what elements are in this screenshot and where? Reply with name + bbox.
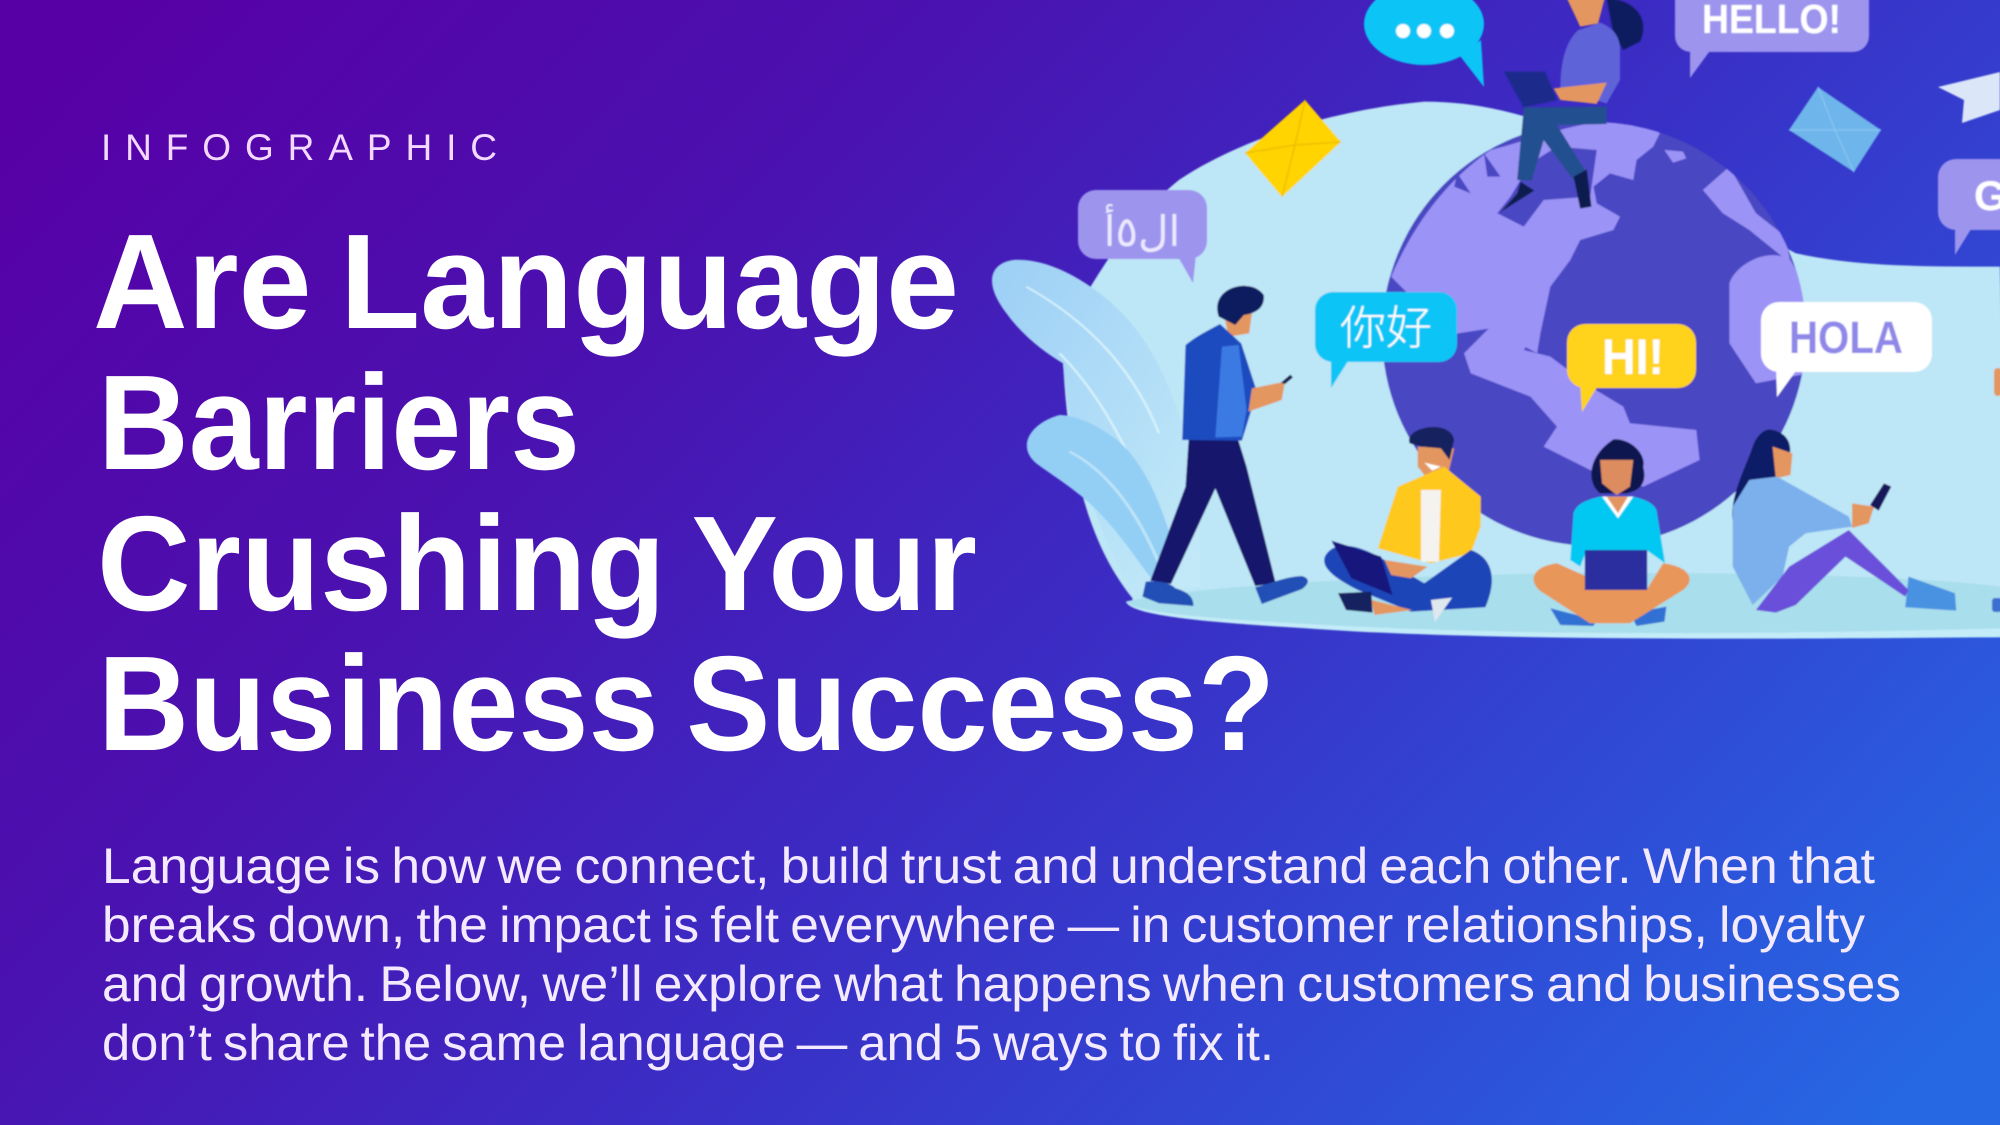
title: Crushing Your (97, 488, 977, 639)
person: woman in cyan top with laptop (1534, 439, 1690, 626)
speech bubble: HI (1567, 324, 1696, 412)
person: woman on globe with laptop (1501, 0, 1643, 212)
speech bubble: HELLO (1675, 0, 1869, 78)
icon: yellow envelope (1245, 100, 1341, 197)
speech bubble: HOLA (1761, 302, 1932, 397)
person: woman with phone leaning back (1732, 429, 1956, 613)
person: walking man with phone (1142, 286, 1308, 606)
land: central and south america (1464, 327, 1700, 487)
icon: blue envelope (1789, 87, 1881, 172)
globe (1382, 121, 1812, 546)
title: Are Language (93, 206, 959, 357)
land: americas north (1385, 121, 1660, 353)
speech bubble: Chinese greeting (1315, 292, 1457, 388)
speech bubble: Arabic (1078, 190, 1207, 283)
title (93, 206, 1275, 779)
intro paragraph: breaks down, the impact is felt everywhere — in customer relationships, loyalty (102, 897, 1865, 953)
illustration: people and globe (992, 0, 2000, 639)
intro paragraph: Language is how we connect, build trust and understand each other. When that (102, 838, 1875, 894)
speech bubble: ellipsis (1364, 0, 1484, 87)
speech bubble: G (1938, 159, 2000, 255)
light blue blob (1063, 102, 2000, 603)
intro paragraph (102, 838, 1901, 1071)
person: man in yellow jacket with laptop (1324, 427, 1492, 622)
speech bubble: Chinese greeting: 你好 (1340, 292, 1432, 358)
icon: paper plane (1938, 72, 2000, 123)
speech bubble: Arabic: ال٥أ (1104, 204, 1180, 256)
small leaf (1027, 415, 1179, 580)
ocean patches (1385, 147, 1597, 300)
title: Barriers (98, 347, 580, 498)
intro paragraph: and growth. Below, we’ll explore what happens when customers and businesses (102, 956, 1901, 1012)
intro paragraph: don’t share the same language — and 5 ways to fix it. (102, 1015, 1274, 1071)
title: Business Success? (98, 628, 1275, 779)
large leaf (992, 260, 1200, 593)
floor (1126, 573, 2000, 639)
right edge figure fragments (1992, 368, 2000, 612)
speech bubble: HI: HI! (1602, 329, 1664, 385)
speech bubble: HOLA: HOLA (1789, 312, 1903, 363)
eyebrow label: INFOGRAPHIC (101, 127, 497, 168)
land: islands and east (1664, 150, 1812, 383)
